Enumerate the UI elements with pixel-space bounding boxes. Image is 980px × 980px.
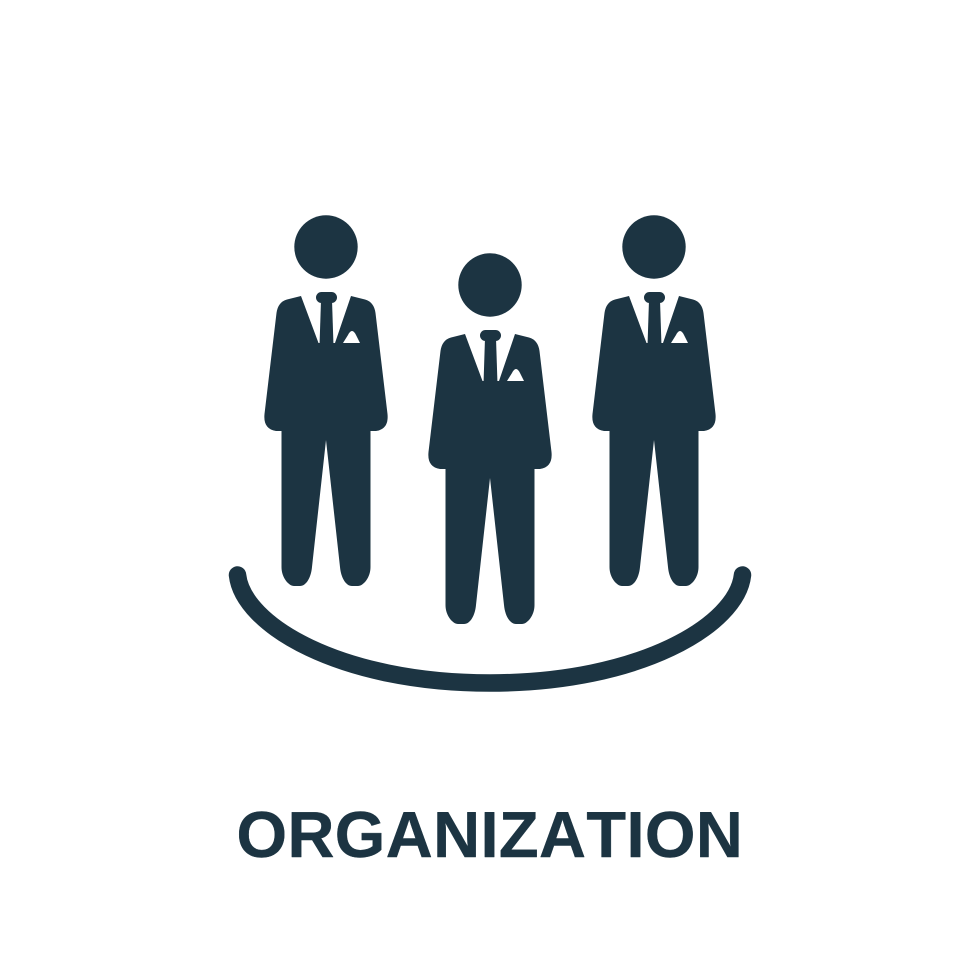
person: right: [592, 215, 716, 586]
person: center: [428, 253, 552, 624]
person: left: [264, 215, 388, 586]
curved base arc: [238, 575, 742, 683]
title: ORGANIZATION: [236, 798, 743, 871]
